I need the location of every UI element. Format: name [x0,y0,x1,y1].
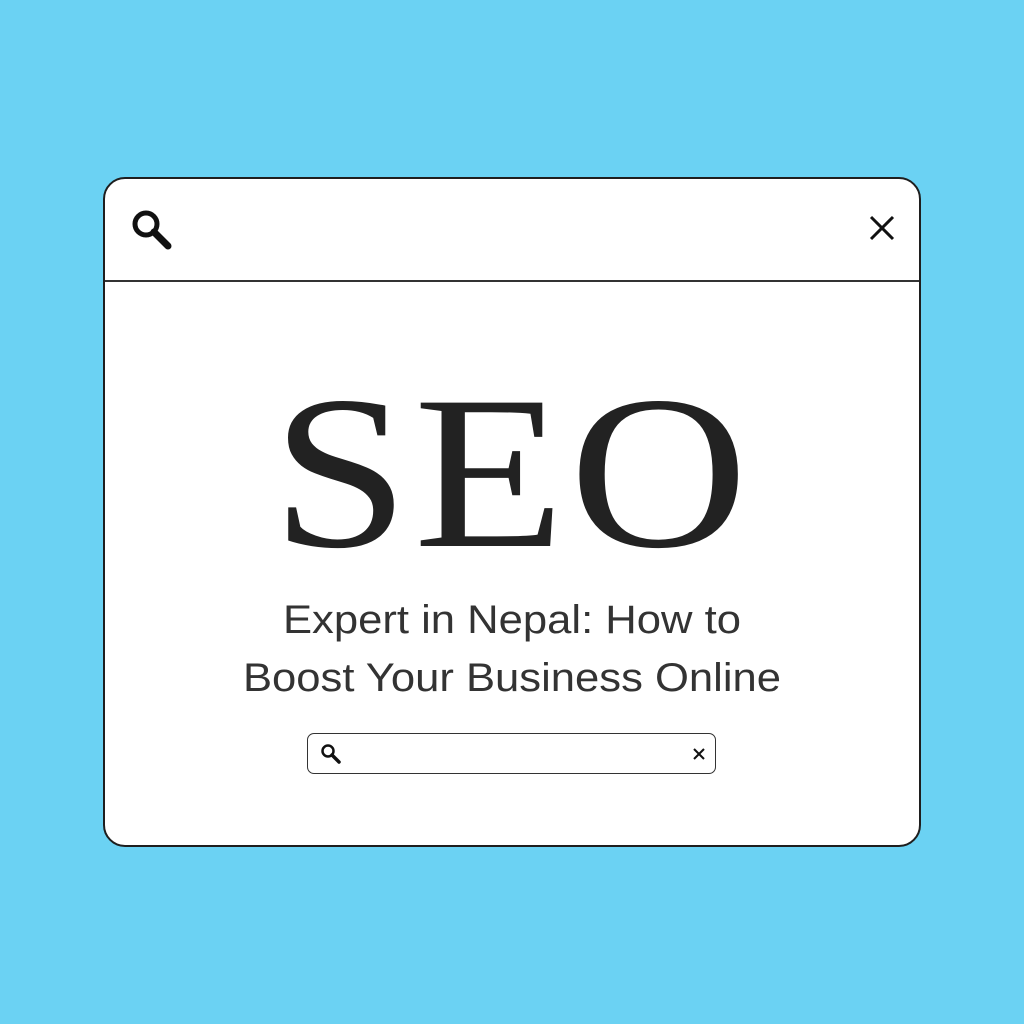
title: SEO: SEO [271,352,753,594]
icon: small close [693,748,705,760]
search bar [307,733,716,774]
icon: search magnifier [132,210,172,250]
subtitle: Boost Your Business Online [243,656,781,700]
subtitle: Expert in Nepal: How to [283,598,741,642]
icon: close [870,216,894,240]
browser window panel [103,177,921,847]
icon: small search [321,744,341,764]
subtitle [243,598,781,700]
header divider [105,280,919,282]
